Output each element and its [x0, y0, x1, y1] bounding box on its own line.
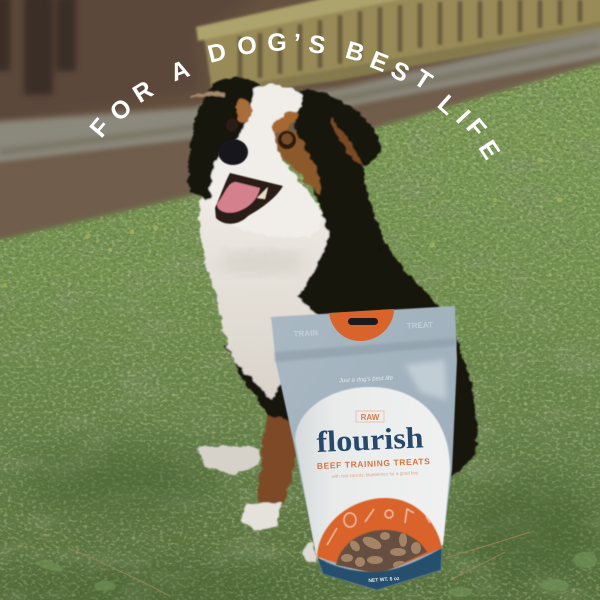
arched headline: FOR A DOG'S BEST LIFE: R [128, 75, 158, 109]
dog: head [188, 77, 384, 250]
background: yellow clover dots [3, 158, 562, 287]
dog: facial features [215, 118, 296, 224]
dog: black between eye and ear [298, 120, 322, 170]
bag: ingredient icons [327, 509, 430, 545]
arched headline: FOR A DOG'S BEST LIFE: B [342, 36, 368, 68]
dog: jaw and mouth [215, 173, 283, 224]
arched headline: FOR A DOG'S BEST LIFE: O [105, 93, 137, 127]
dog: face white [210, 85, 321, 238]
arched headline: FOR A DOG'S BEST LIFE: E [366, 46, 392, 78]
dog: right ear and neck [295, 90, 384, 250]
bag: treat pieces [341, 532, 421, 569]
dog: left ear highlight [192, 93, 224, 98]
arched headline: FOR A DOG'S BEST LIFE: O [236, 31, 258, 61]
bag: TRAIN label: TRAIN [293, 328, 319, 339]
dog: front paw [240, 504, 282, 532]
dog: ear tan [330, 118, 362, 168]
arched headline: FOR A DOG'S BEST LIFE: L [432, 89, 462, 121]
dog: right eye patch [275, 132, 321, 196]
arched headline: FOR A DOG'S BEST LIFE: S [386, 56, 414, 88]
bag: orange top tab [329, 309, 394, 341]
bag: product name: BEEF TRAINING TREATS [317, 456, 430, 471]
dog [188, 77, 478, 562]
background: gravel path [0, 26, 600, 166]
dog: chest shadow [216, 252, 308, 272]
arched headline: FOR A DOG'S BEST LIFE: A [167, 55, 193, 87]
dog: tan foreleg [259, 415, 300, 508]
bag: RAW badge: RAW [361, 413, 380, 422]
arched headline: FOR A DOG'S BEST LIFE: G [267, 29, 287, 57]
dog: left brow tan [236, 99, 251, 124]
dog: nose [218, 139, 248, 165]
dog: small paw behind bag [303, 540, 317, 562]
arched headline: FOR A DOG'S BEST LIFE: F [460, 113, 492, 143]
product bag [271, 306, 457, 590]
dog: black body [226, 165, 478, 480]
bag: tagline: Just a dog's best life [338, 376, 394, 384]
dog: tongue [217, 182, 260, 213]
background: wooden fence [196, 0, 600, 98]
dog: rear paw [197, 445, 261, 475]
arched headline: FOR A DOG'S BEST LIFE: I [450, 105, 476, 129]
bag: navy base [317, 548, 442, 590]
background: lower dirt [0, 56, 600, 242]
bag: RAW badge [356, 411, 384, 422]
arched headline: FOR A DOG'S BEST LIFE: D [205, 37, 229, 69]
bag: treats window [336, 530, 427, 574]
bag: pouch body [271, 306, 457, 590]
arched headline: FOR A DOG'S BEST LIFE: S [307, 30, 327, 60]
bag: white label arch [295, 387, 450, 560]
dog: right eye [278, 131, 296, 149]
bag: seal band shadow [275, 338, 456, 362]
background: tree trunks [0, 0, 76, 95]
dog: left ear [188, 77, 270, 200]
background: upper bank [0, 0, 280, 130]
arched headline: FOR A DOG'S BEST LIFE [84, 29, 505, 165]
dog: right brow tan [272, 111, 298, 134]
background: path edge [0, 45, 600, 152]
arched headline: FOR A DOG'S BEST LIFE: E [473, 135, 505, 165]
bag: subtitle: with real carrots, blueberries for a good boy [332, 470, 419, 479]
arched headline: FOR A DOG'S BEST LIFE: T [409, 64, 437, 96]
dog: white chest [199, 193, 332, 400]
bag: orange window band [317, 498, 442, 575]
bag: hang slot [348, 318, 378, 325]
dog: tooth [257, 187, 268, 199]
background: dry straw [68, 532, 530, 596]
bag: flourish logo: flourish [316, 421, 425, 459]
arched headline: FOR A DOG'S BEST LIFE: ’ [293, 29, 301, 57]
dog: right iris [282, 134, 292, 144]
dog: left eye [226, 118, 238, 132]
background: darker grass patches [0, 450, 600, 600]
bag: foil highlight [405, 360, 447, 400]
arched headline: FOR A DOG'S BEST LIFE: F [84, 113, 116, 143]
background: foreground leaves [35, 552, 597, 597]
bag: net weight: NET WT. 6 oz [368, 576, 400, 584]
bag: TREAT label: TREAT [407, 320, 433, 331]
